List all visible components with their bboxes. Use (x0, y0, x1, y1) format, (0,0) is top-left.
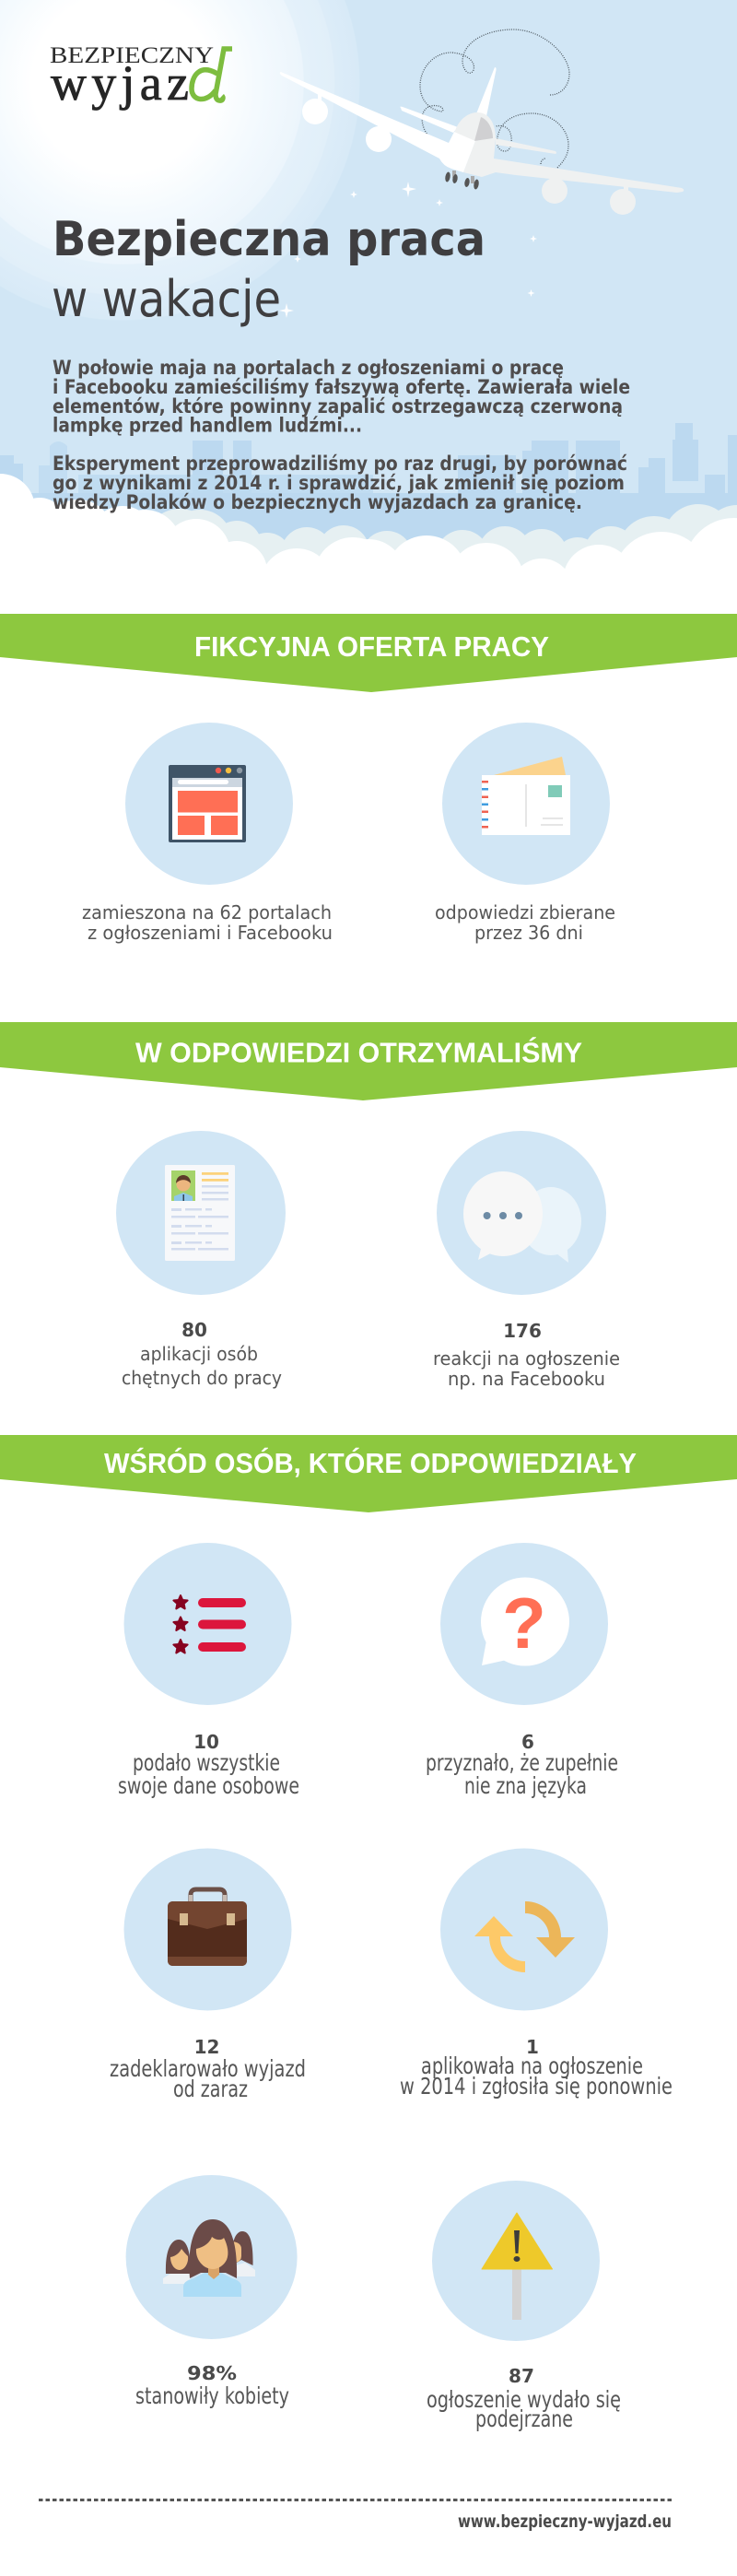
intro text (53, 357, 630, 513)
intro text: elementów, które powinny zapalić ostrzegawczą czerwoną (53, 395, 623, 418)
caption: zadeklarowało wyjazd (110, 2055, 306, 2082)
caption (118, 1731, 299, 1799)
icon: speech bubbles (463, 1171, 581, 1263)
caption: odpowiedzi zbierane (435, 901, 615, 923)
caption (427, 2365, 621, 2432)
central woman (183, 2219, 241, 2297)
intro text: lampkę przed handlem ludźmi... (53, 415, 362, 437)
icon: browser window (169, 765, 246, 842)
panel: 98% women (126, 2175, 298, 2409)
caption (433, 1320, 620, 1390)
caption: z ogłoszeniami i Facebooku (88, 922, 333, 944)
intro text: Eksperyment przeprowadziliśmy po raz drugi, by porównać (53, 453, 627, 475)
banner: wśród osób (0, 1435, 737, 1512)
icon: question bubble (481, 1578, 569, 1666)
caption (426, 1731, 618, 1799)
caption: 10 (193, 1731, 219, 1753)
logo: wyjaz (51, 55, 189, 111)
right engines (542, 173, 636, 215)
caption: 98% (187, 2362, 237, 2384)
footer: www.bezpieczny-wyjazd.eu (458, 2511, 672, 2532)
panel: 6 no language (426, 1543, 618, 1799)
intro text: wiedzy Polaków o bezpiecznych wyjazdach za granicę. (53, 491, 582, 513)
logo: BEZPIECZNY (50, 43, 214, 68)
panel: header sky (0, 0, 737, 629)
caption: reakcji na ogłoszenie (433, 1347, 620, 1370)
caption: przyznało, że zupełnie (426, 1749, 618, 1776)
caption (400, 2036, 673, 2100)
circle (432, 2181, 600, 2341)
icon: warning sign (482, 2213, 553, 2320)
right wing and fuselage (463, 138, 684, 193)
circle (123, 1849, 291, 2011)
banner: w odpowiedzi otrzymaliśmy (0, 1022, 737, 1100)
caption: 87 (509, 2365, 534, 2387)
caption: 176 (503, 1320, 542, 1342)
fuselage rear (454, 112, 496, 141)
caption: nie zna języka (464, 1772, 587, 1799)
icon: three women (163, 2219, 255, 2297)
icon: CV document (165, 1165, 235, 1261)
intro text: go z wynikami z 2014 r. i sprawdzić, jak zmienił się poziom (53, 472, 625, 494)
title (52, 212, 485, 328)
panel: 36 days (435, 723, 615, 944)
city skyline (0, 423, 737, 576)
caption (122, 1319, 282, 1389)
logo (50, 43, 232, 111)
panel: 12 immediate departure (110, 1849, 306, 2102)
panel: 87 suspicious (427, 2181, 621, 2432)
caption: 80 (181, 1319, 207, 1341)
caption: podejrzane (475, 2405, 573, 2432)
caption: stanowiły kobiety (135, 2382, 289, 2409)
circle (116, 1131, 286, 1295)
rear wing left engines (302, 94, 392, 152)
caption: chętnych do pracy (122, 1367, 282, 1389)
circle (125, 723, 293, 885)
banner: fikcyjna oferta pracy: FIKCYJNA OFERTA PRACY (194, 630, 549, 663)
circle (123, 1543, 291, 1705)
caption (110, 2036, 306, 2102)
caption (82, 901, 333, 944)
caption: swoje dane osobowe (118, 1772, 299, 1799)
circle (437, 1131, 606, 1295)
left tailplane (400, 107, 458, 133)
caption: aplikowała na ogłoszenie (421, 2053, 643, 2079)
circle (442, 723, 610, 885)
icon: briefcase (168, 1889, 247, 1966)
caption (135, 2362, 289, 2409)
landing gear (444, 171, 480, 190)
airplane (279, 29, 684, 318)
tail fin (475, 67, 497, 116)
title: w wakacje (52, 270, 281, 328)
icon: green letter d (192, 49, 232, 100)
caption: 6 (521, 1731, 534, 1753)
banner: wśród osób: WŚRÓD OSÓB, KTÓRE ODPOWIEDZIAŁY (104, 1446, 637, 1479)
front clouds (0, 474, 737, 629)
caption: 1 (526, 2036, 539, 2058)
dotted flight trails (420, 29, 569, 168)
grey tail section (474, 117, 493, 141)
panel: 80 applications (116, 1131, 286, 1389)
sparkle stars (279, 182, 537, 318)
caption (435, 901, 615, 944)
caption: 12 (194, 2036, 219, 2058)
caption: podało wszystkie (133, 1749, 280, 1776)
caption: aplikacji osób (140, 1343, 258, 1365)
panel: 176 reactions (433, 1131, 620, 1390)
sun glow (0, 0, 360, 321)
circle (440, 1543, 608, 1705)
caption: zamieszona na 62 portalach (82, 901, 332, 923)
left wing and fuselage (280, 72, 475, 172)
icon: cycle arrows (474, 1908, 575, 1967)
caption: przez 36 dni (474, 922, 583, 944)
banner: fikcyjna oferta pracy (0, 614, 737, 692)
caption: np. na Facebooku (448, 1368, 605, 1390)
caption: w 2014 i zgłosiła się ponownie (400, 2073, 673, 2100)
back clouds (145, 504, 737, 590)
right woman (230, 2231, 255, 2276)
circle (440, 1849, 608, 2011)
caption: od zaraz (173, 2076, 248, 2102)
panel: 10 full data (118, 1543, 299, 1799)
title: Bezpieczna praca (53, 212, 485, 267)
panel: portals (82, 723, 333, 944)
banner: w odpowiedzi otrzymaliśmy: W ODPOWIEDZI OTRZYMALIŚMY (135, 1036, 582, 1069)
circle (126, 2175, 298, 2339)
caption: ogłoszenie wydało się (427, 2386, 621, 2413)
panel: 1 repeated application (400, 1849, 673, 2100)
left woman (163, 2240, 191, 2284)
icon: star list (173, 1595, 246, 1653)
icon: question bubble: ? (502, 1582, 546, 1664)
right tailplane (496, 138, 556, 154)
icon: postcard (482, 757, 570, 835)
intro text: i Facebooku zamieściliśmy fałszywą ofertę. Zawierała wiele (53, 376, 630, 398)
intro text: W połowie maja na portalach z ogłoszeniami o pracę (53, 357, 564, 379)
